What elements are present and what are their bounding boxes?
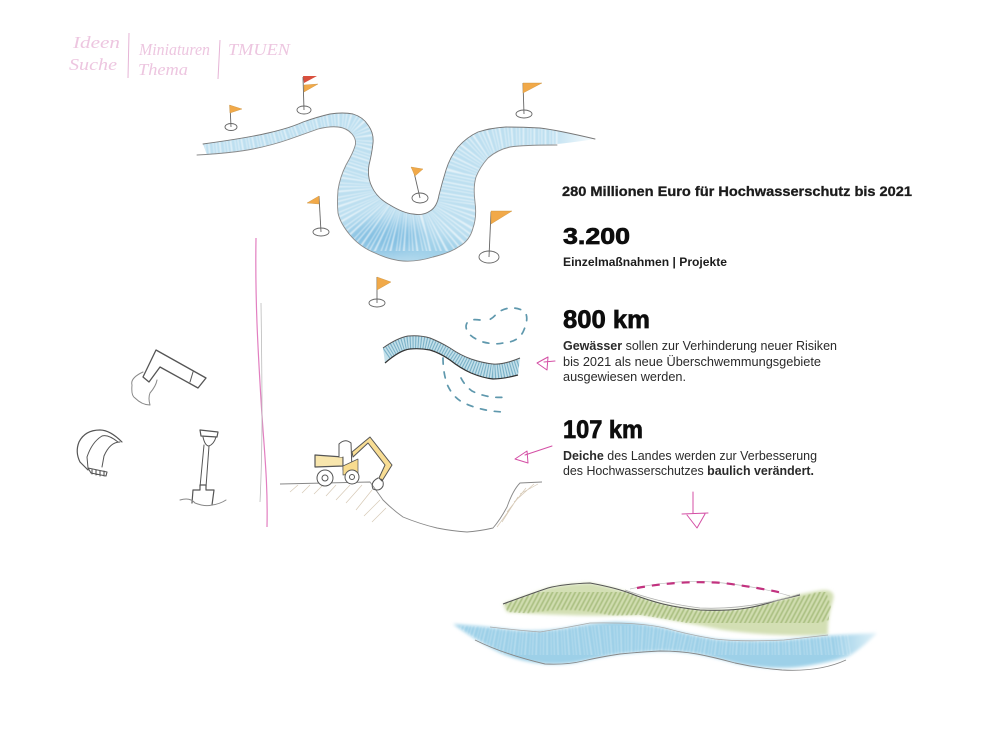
main river sketch <box>197 113 595 261</box>
arrow: pink down <box>682 492 708 528</box>
arrow: pink to small river <box>537 357 555 370</box>
infographic canvas <box>69 33 912 671</box>
text: 3.200 measures: Einzelmaßnahmen | Projekte <box>563 257 727 269</box>
icon: excavator arm and bucket <box>132 350 206 405</box>
dashed flood outline <box>466 308 527 344</box>
handwritten header <box>69 33 292 79</box>
text: 3.200 measures <box>563 223 727 269</box>
handwritten header: TMUEN <box>228 40 292 59</box>
handwritten header: Miniaturen <box>138 40 210 59</box>
flag 1 <box>225 105 242 130</box>
arrow: pink to excavator <box>515 446 552 463</box>
icon: spade in ground <box>180 430 226 506</box>
flag 7 <box>369 277 391 307</box>
dashed magenta former dike line <box>630 581 790 596</box>
icon: excavator bucket with teeth <box>77 430 122 476</box>
flag 5 <box>307 196 329 236</box>
handwritten header: Ideen <box>72 33 120 52</box>
flag 6 <box>479 211 512 263</box>
text: 800 km <box>563 306 837 384</box>
icon: flags along the river <box>225 76 542 307</box>
text: 800 km: 800 km <box>563 306 650 334</box>
flag 2 red and orange <box>297 76 318 114</box>
text: 800 km: ausgewiesen werden. <box>563 370 686 384</box>
dashed flood channels <box>443 358 507 412</box>
flag 3 <box>516 83 542 118</box>
dike and river sketch <box>453 581 877 670</box>
icon: yellow excavator <box>315 437 392 490</box>
handwritten header: Thema <box>138 60 188 79</box>
handwritten header: Suche <box>69 55 118 74</box>
text: 107 km: des Hochwasserschutzes baulich verändert. <box>563 464 814 478</box>
excavation pit ground line <box>280 482 542 532</box>
text: main heading: 280 Millionen Euro für Hochwasserschutz bis 2021 <box>562 184 913 199</box>
text: 3.200 measures: 3.200 <box>563 223 630 249</box>
pink vertical divider <box>256 238 267 527</box>
text: 800 km: bis 2021 als neue Überschwemmungsgebiete <box>563 355 821 369</box>
text: 107 km: Deiche des Landes werden zur Verbesserung <box>563 449 817 463</box>
ground hatching <box>290 484 538 527</box>
text: 800 km: Gewässer sollen zur Verhinderung neuer Risiken <box>563 339 837 353</box>
flag 4 <box>411 167 428 203</box>
text: 107 km <box>563 416 817 478</box>
text: 107 km: 107 km <box>563 416 643 444</box>
small river with dashed flood zones <box>383 308 527 412</box>
